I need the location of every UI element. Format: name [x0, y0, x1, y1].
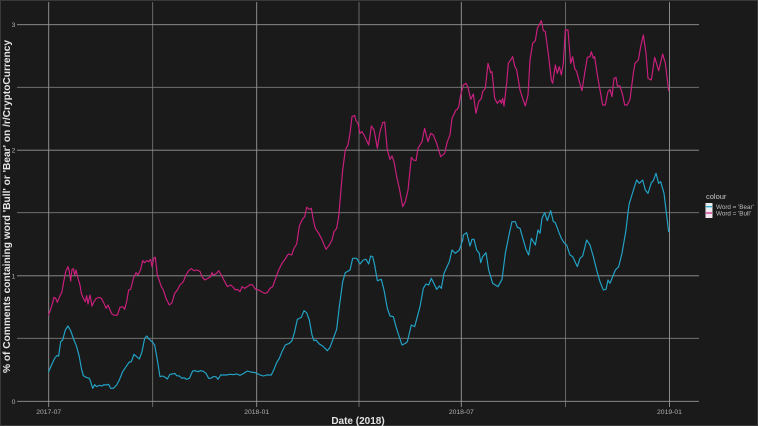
- x-axis tick labels: 2018-01: [244, 409, 269, 416]
- y-axis tick labels: 2: [12, 148, 16, 155]
- y-axis tick labels: 3: [12, 22, 16, 29]
- x-axis tick labels: 2017-07: [36, 409, 61, 416]
- legend key: Bear: Word = 'Bear': [716, 204, 754, 211]
- series: Word = 'Bull' line: [49, 21, 669, 315]
- y-axis title: % of Comments containing word 'Bull' or 'Bear' on /r/CryptoCurrency: [2, 40, 13, 373]
- legend title: colour: [706, 192, 727, 201]
- x-axis tick labels: 2018-07: [449, 409, 474, 416]
- series: Word = 'Bear' line: [49, 173, 669, 388]
- legend: [706, 192, 754, 218]
- y-axis tick labels: 1: [12, 273, 16, 280]
- legend key: Bull: Word = 'Bull': [716, 210, 751, 218]
- y-axis tick labels: 0: [12, 399, 16, 406]
- y-axis tick labels: [12, 22, 16, 406]
- x-axis tick labels: 2019-01: [657, 409, 682, 416]
- x-axis tick labels: [36, 409, 682, 416]
